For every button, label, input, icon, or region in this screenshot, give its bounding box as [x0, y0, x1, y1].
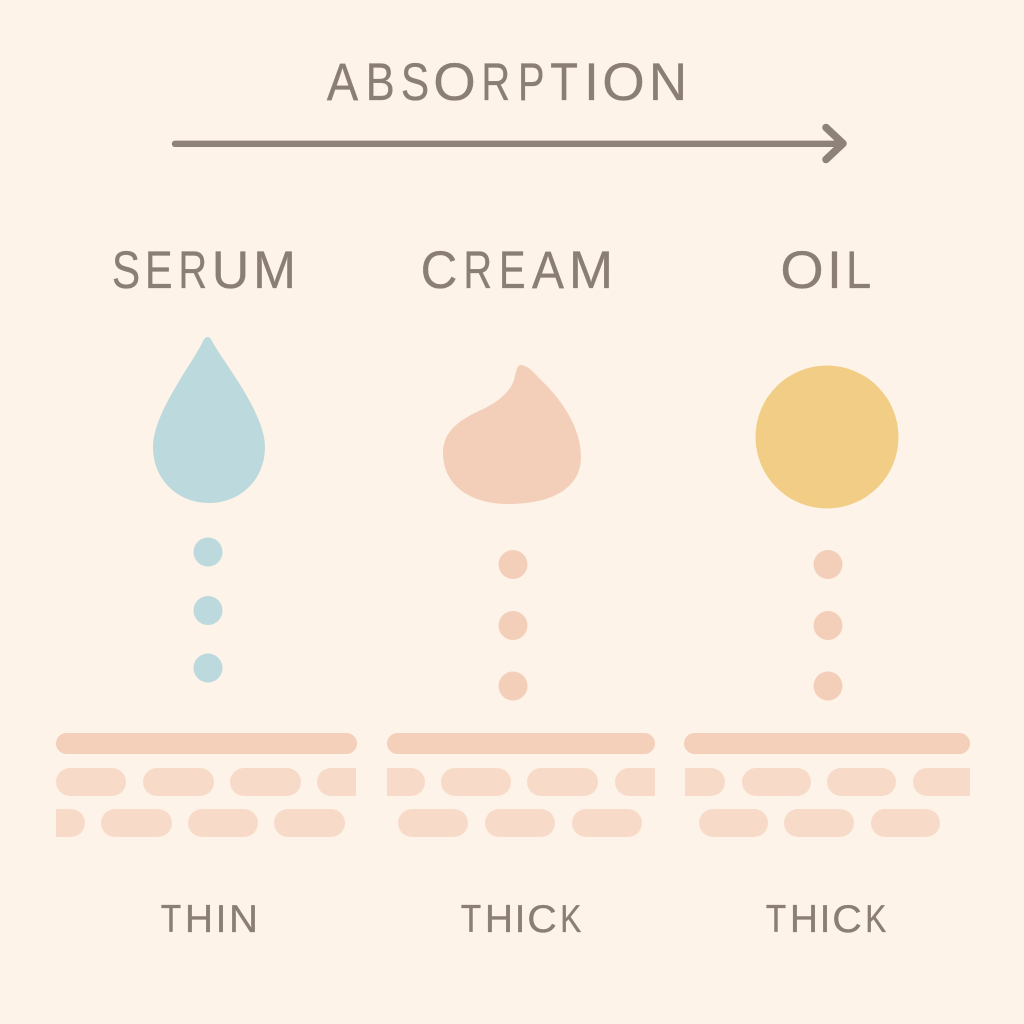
- heading: cream: E: [499, 240, 526, 299]
- label: thick (cream): [461, 897, 582, 941]
- label: thin: H: [185, 898, 213, 941]
- skin layers: serum: [56, 733, 357, 837]
- arrow: absorption direction: [175, 128, 843, 160]
- icon: serum drop: [153, 337, 265, 503]
- skin layers: oil: [684, 733, 970, 837]
- title: absorption: S: [401, 54, 429, 112]
- label: thick (oil): C: [832, 898, 862, 941]
- heading: oil: [780, 240, 871, 300]
- label: thick (cream): C: [527, 898, 557, 941]
- title: absorption: [327, 52, 687, 112]
- title: absorption: P: [518, 52, 545, 111]
- heading: oil: O: [780, 240, 824, 300]
- dots: serum: [194, 538, 222, 682]
- heading: cream: M: [569, 241, 613, 300]
- label: thick (oil): K: [865, 897, 887, 941]
- heading: cream: A: [532, 240, 564, 300]
- title: absorption: R: [481, 52, 510, 111]
- label: thick (cream): H: [485, 898, 513, 941]
- heading: cream: R: [463, 240, 492, 299]
- heading: cream: C: [421, 241, 457, 300]
- label: thick (oil): [766, 897, 887, 941]
- label: thin: I: [216, 898, 226, 941]
- title: absorption: B: [366, 53, 395, 112]
- dots: cream: [498, 550, 528, 700]
- label: thick (cream): T: [461, 897, 481, 941]
- title: absorption: T: [550, 53, 578, 112]
- label: thick (oil): H: [790, 898, 818, 941]
- label: thin: [161, 897, 258, 941]
- label: thin: T: [161, 897, 181, 941]
- title: absorption: N: [649, 53, 687, 112]
- dots: oil: [814, 550, 842, 700]
- label: thick (cream): K: [560, 897, 582, 941]
- skin layers: cream: [387, 733, 655, 837]
- title: absorption: A: [327, 52, 359, 112]
- heading: cream: [421, 240, 613, 300]
- title: absorption: O: [433, 53, 476, 112]
- title: absorption: O: [602, 53, 645, 112]
- heading: serum: E: [145, 241, 173, 300]
- label: thick (oil): T: [766, 897, 786, 941]
- icon: cream dollop: [443, 365, 581, 504]
- label: thin: N: [229, 898, 258, 941]
- heading: serum: R: [178, 240, 207, 299]
- label: thick (cream): I: [515, 898, 525, 941]
- label: thick (oil): I: [820, 898, 830, 941]
- heading: serum: M: [253, 241, 296, 300]
- heading: oil: L: [846, 241, 871, 300]
- heading: serum: [112, 240, 296, 300]
- heading: oil: I: [827, 241, 842, 300]
- heading: serum: U: [212, 242, 249, 300]
- heading: serum: S: [112, 242, 140, 300]
- icon: oil circle: [756, 366, 898, 508]
- title: absorption: I: [584, 53, 599, 112]
